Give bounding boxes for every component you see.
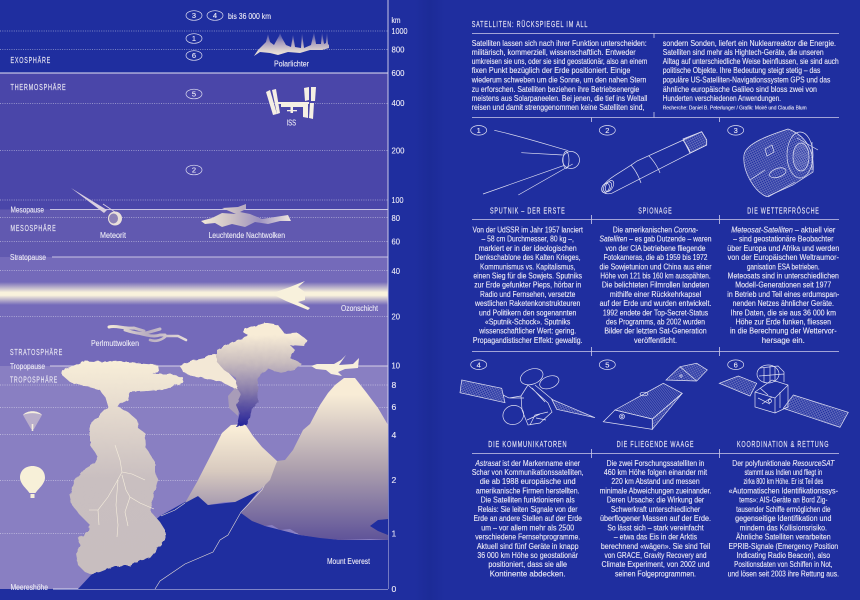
thundercloud — [62, 361, 184, 574]
satellite orbit markers — [186, 11, 271, 175]
body text: von der CIA betriebene fliegende — [606, 243, 706, 253]
body text: verschiedene Fernsehprogramme. — [475, 532, 580, 542]
km axis labels: 200 — [392, 146, 405, 156]
km axis labels: km — [392, 15, 400, 25]
body text: nenden Netzes ähnlicher Geräte. — [733, 298, 834, 308]
body text: auf der Erde und wurden entwickelt. — [600, 298, 711, 308]
km axis labels: 4 — [392, 430, 396, 440]
icon: parachute — [23, 411, 42, 431]
lightning — [89, 445, 154, 537]
illustration: weather satellite — [744, 129, 818, 197]
body text: Ähnliche Satelliten verarbeiten — [736, 532, 831, 542]
body text — [727, 224, 839, 345]
number badge 5 — [599, 360, 615, 370]
phenomena labels: Polarlichter — [274, 58, 309, 68]
body text: 36 000 km Höhe so geostationär — [477, 550, 578, 560]
layer labels: Mesopause — [10, 204, 44, 214]
body text: Der polyfunktionale ResourceSAT — [732, 458, 835, 468]
icon: ISS — [266, 87, 316, 119]
body text: über Europa und Afrika und werden — [727, 243, 839, 253]
intro text: fixen Punkt bezüglich der Erde positioniert. Einige — [472, 65, 631, 75]
body text: – sind geostationäre Beobachter — [733, 234, 834, 244]
body text: – etwa das Eis in der Arktis — [614, 532, 697, 542]
km axis labels: 2 — [392, 475, 396, 485]
body text: Propagandistischer Effekt: gewaltig. — [473, 335, 583, 345]
body text: um – vor allem mehr als 2500 — [481, 522, 574, 532]
body text: 1992 endete der Top-Secret-Status — [603, 307, 708, 317]
body text: Meteosats sind in unterschiedlichen — [728, 270, 839, 280]
body text: hersage ein. — [762, 335, 805, 345]
km axis labels: 0 — [392, 584, 396, 594]
intro text: ähnliche europäische Galileo sind bloss zwei von — [663, 84, 817, 94]
body text: Ihre Daten, die sie aus 36 000 km — [731, 307, 836, 317]
body text: Von der UdSSR im Jahr 1957 lanciert — [473, 224, 583, 234]
body text: Meteosat-Satelliten – aktuell vier — [731, 224, 835, 234]
intro text: umkreisen sie uns, oder sie sind geostationär, also an einem — [472, 56, 647, 66]
body text: Schwerkraft unterschiedlicher — [611, 504, 700, 514]
body text: von der Europäischen Weltraumor- — [728, 252, 839, 262]
body text: amerikanische Firmen herstellten. — [476, 486, 580, 496]
body text: Fotokameras, die ab 1959 bis 1972 — [604, 252, 708, 262]
number badge 3: 3 — [734, 126, 738, 135]
phenomena labels: Leuchtende Nachtwolken — [208, 230, 285, 240]
body text: veröffentlicht. — [634, 335, 677, 345]
body text: von GRACE, Gravity Recovery and — [604, 550, 707, 560]
body text: Indicating Radio Beacon), also — [736, 550, 830, 560]
number badge 5: 5 — [605, 360, 609, 369]
satellite orbit markers: 3 — [192, 11, 196, 20]
body text: mindern das Kollisionsrisiko. — [740, 522, 827, 532]
body text — [473, 224, 583, 345]
body text: die Sowjetunion und China aus einer — [600, 261, 712, 271]
heading: DIE KOMMUNIKATOREN — [488, 439, 567, 449]
km axis labels: 400 — [392, 98, 405, 108]
body text: Kontinente abdecken. — [490, 568, 566, 578]
layer labels: THERMOSPHÄRE — [10, 82, 66, 92]
phenomena labels: Mount Everest — [327, 556, 370, 566]
body text — [600, 224, 712, 345]
satellite orbit markers: 2 — [192, 166, 196, 175]
body text: überflogener Massen auf der Erde. — [600, 513, 711, 523]
intro text: zu erforschen. Satelliten beziehen ihre Betriebsenergie — [472, 84, 640, 94]
layer labels — [10, 55, 66, 592]
body text: Satelliten – es gab Dutzende – waren — [600, 234, 712, 244]
body text: Die amerikanischen Corona- — [613, 224, 698, 234]
satellite orbit markers: bis 36 000 km — [228, 11, 271, 21]
body text: Bilder der letzten Sat-Generation — [604, 326, 707, 336]
layer labels: EXOSPHÄRE — [10, 55, 51, 65]
title: SATELLITEN: RÜCKSPIEGEL IM ALL — [472, 19, 588, 29]
icon: aurora — [254, 32, 329, 56]
km axis labels: 8 — [392, 380, 396, 390]
body text: Denkschablone des Kalten Krieges, — [475, 252, 581, 262]
mountain: Everest — [155, 378, 388, 589]
panel: right page — [460, 19, 848, 578]
nacreous clouds — [109, 326, 186, 341]
body text: mithilfe einer Rückkehrkapsel — [610, 289, 701, 299]
phenomena labels: Ozonschicht — [341, 303, 378, 313]
body text — [472, 458, 584, 578]
km axis labels: 100 — [392, 195, 404, 205]
phenomena labels: Meteorit — [100, 230, 127, 240]
satellite orbit markers: 4 — [213, 11, 217, 20]
satellite orbit markers: 5 — [192, 90, 196, 99]
number badge 1 — [471, 126, 487, 135]
intro text: Recherche: Daniel B. Peterlunger / Grafik: Moiré und Claudia Blum — [663, 105, 807, 111]
illustration: spy satellite — [600, 132, 707, 194]
body text: des Programms, ab 2002 wurden — [606, 316, 705, 326]
phenomena labels: Perlmuttwolken — [91, 338, 139, 348]
km axis labels: 6 — [392, 402, 396, 412]
body text: die ab 1988 europäische und — [480, 476, 576, 486]
body text: Die Satelliten funktionieren als — [481, 495, 575, 505]
number badge 1: 1 — [477, 126, 481, 135]
km axis labels: 10 — [392, 360, 400, 370]
body text: Modell-Generationen seit 1977 — [735, 280, 831, 290]
body text: Erde an andere Stellen auf der Erde — [474, 513, 582, 523]
body text: Aktuell sind fünf Geräte in knapp — [477, 541, 579, 551]
illustration: communications satellite — [460, 366, 595, 428]
panel: Fliegende Waage — [599, 360, 711, 578]
volcano — [161, 424, 277, 516]
number badge 4 — [471, 360, 487, 370]
noctilucent clouds — [201, 204, 291, 227]
body text: Relais: Sie leiten Signale von der — [478, 504, 578, 514]
body text: markiert er in der ideologischen — [479, 243, 577, 253]
panel: Koordination & Rettung — [719, 360, 848, 578]
layer labels: Meereshöhe — [10, 582, 48, 592]
km axis labels: 800 — [392, 44, 405, 54]
body text: Höhe zur Erde funken, fliessen — [736, 316, 831, 326]
intro text: meistens aus Solarpaneelen. Bei jenen, die tief ins Weltall — [472, 93, 647, 103]
illustration: ResourceSAT — [719, 365, 848, 427]
body text: Astrasat ist der Markenname einer — [475, 458, 580, 468]
body text: westlichen Raketenkonstrukteuren — [474, 298, 581, 308]
phenomena labels — [91, 58, 378, 566]
km axis labels: 1 — [392, 528, 396, 538]
body text: Höhe von 121 bis 160 km ausspähten. — [600, 270, 711, 280]
body text: ganisation ESA betrieben. — [747, 261, 820, 271]
volcanic plume — [180, 323, 307, 427]
body text: So lässt sich – stark vereinfacht — [607, 522, 704, 532]
panel: Wetterfrösche — [727, 126, 839, 345]
heading: DIE FLIEGENDE WAAGE — [617, 439, 694, 449]
km axis labels: 1000 — [392, 26, 408, 36]
intro text: wiederum schweben um die Sonne, um den nahen Stern — [471, 74, 647, 84]
body text: 460 km Höhe folgen einander mit — [604, 467, 708, 477]
ozone layer band — [0, 282, 388, 305]
body text: – 58 cm Durchmesser, 80 kg –, — [482, 234, 574, 244]
body text — [600, 458, 711, 578]
intro text: politische Objekte. Ihre Bedeutung steigt stetig – das — [663, 65, 820, 75]
body text: Deren Ursache: die Wirkung der — [607, 495, 704, 505]
icon: hot-air balloon — [20, 466, 45, 498]
ground — [78, 489, 388, 589]
panel: Spionage — [599, 126, 712, 345]
number badge 2 — [599, 126, 615, 135]
heading: DIE WETTERFRÖSCHE — [747, 206, 820, 216]
body text: Die zwei Forschungssatelliten in — [607, 458, 705, 468]
body text: zur Erde gefunkter Pieps, hörbar in — [474, 280, 581, 290]
layer labels: Stratopause — [10, 252, 46, 262]
body text: Kommunismus vs. Kapitalismus, — [480, 261, 575, 271]
number badge 3 — [728, 126, 744, 135]
intro text: militärisch, kommerziell, wissenschaftlich. Entweder — [472, 47, 636, 57]
intro text — [471, 38, 839, 112]
body text: minimale Abweichungen zueinander. — [600, 486, 711, 496]
km axis labels: 60 — [392, 236, 400, 246]
body text: stammt aus Indien und fliegt in — [744, 467, 822, 477]
body text: berechnend «wägen». Sie sind Teil — [601, 541, 710, 551]
body text: Schar von Kommunikationssatelliten, — [472, 467, 584, 477]
icon: stealth aircraft — [273, 281, 310, 310]
panel: Kommunikatoren — [460, 360, 595, 578]
phenomena labels: ISS — [286, 118, 296, 128]
body text: in die Berechnung der Wettervor- — [730, 326, 837, 336]
km axis labels: 80 — [392, 213, 400, 223]
body text: «Sputnik-Schock». Sputniks — [485, 316, 570, 326]
body text: 220 km Abstand und messen — [611, 476, 700, 486]
body text: seinen Folgeprogrammen. — [615, 568, 696, 578]
panel: atmosphere chart — [0, 0, 408, 594]
illustration: Sputnik — [483, 130, 580, 195]
body text: gegenseitige Identifikation und — [735, 513, 832, 523]
layer labels: TROPOSPHÄRE — [10, 374, 58, 384]
body text: Climate Experiment, von 2002 und — [602, 559, 710, 569]
body text: und Politikern den sogenannten — [479, 307, 577, 317]
intro text: reisen und damit strenggenommen keine Satelliten sind, — [472, 102, 644, 112]
intro text: Hunderten verschiedenen Anwendungen. — [663, 93, 781, 103]
body text: wissenschaftlicher Wert: gering. — [478, 326, 576, 336]
body text: positioniert, dass sie alle — [488, 559, 567, 569]
intro text: Satelliten lassen sich nach ihrer Funktion unterscheiden: — [472, 38, 647, 48]
heading: SPUTNIK – DER ERSTE — [490, 206, 566, 216]
number badge 4: 4 — [477, 360, 481, 369]
number badge 6: 6 — [734, 360, 738, 369]
layer labels: STRATOSPHÄRE — [10, 347, 63, 357]
panel: Sputnik — [471, 126, 583, 345]
atmosphere bands — [0, 0, 388, 589]
km axis labels: 20 — [392, 312, 400, 322]
layer labels: MESOSPHÄRE — [10, 223, 56, 233]
body text: «Automatischen Identifikationssys- — [729, 486, 838, 496]
body text: einen Sieg für die Sowjets. Sputniks — [473, 270, 582, 280]
km axis labels — [392, 15, 408, 594]
satellite orbit markers: 6 — [192, 51, 196, 60]
body text — [728, 458, 839, 578]
km axis labels: 600 — [392, 68, 405, 78]
illustration: GRACE twin satellites — [603, 363, 707, 429]
icon: airplane — [311, 355, 359, 376]
km axis labels: 40 — [392, 266, 400, 276]
icon: meteor — [71, 188, 122, 226]
heading: SPIONAGE — [638, 206, 672, 216]
body text: Die belichteten Filmrollen landeten — [602, 280, 709, 290]
number badge 2: 2 — [605, 126, 609, 135]
number badge 6 — [728, 360, 744, 370]
body text: tems»: AIS-Geräte an Bord Zig- — [739, 495, 828, 505]
body text: Radio und Fernsehen, versetzte — [480, 289, 576, 299]
satellite orbit markers: 1 — [192, 34, 196, 43]
layer labels: Tropopause — [10, 361, 45, 371]
